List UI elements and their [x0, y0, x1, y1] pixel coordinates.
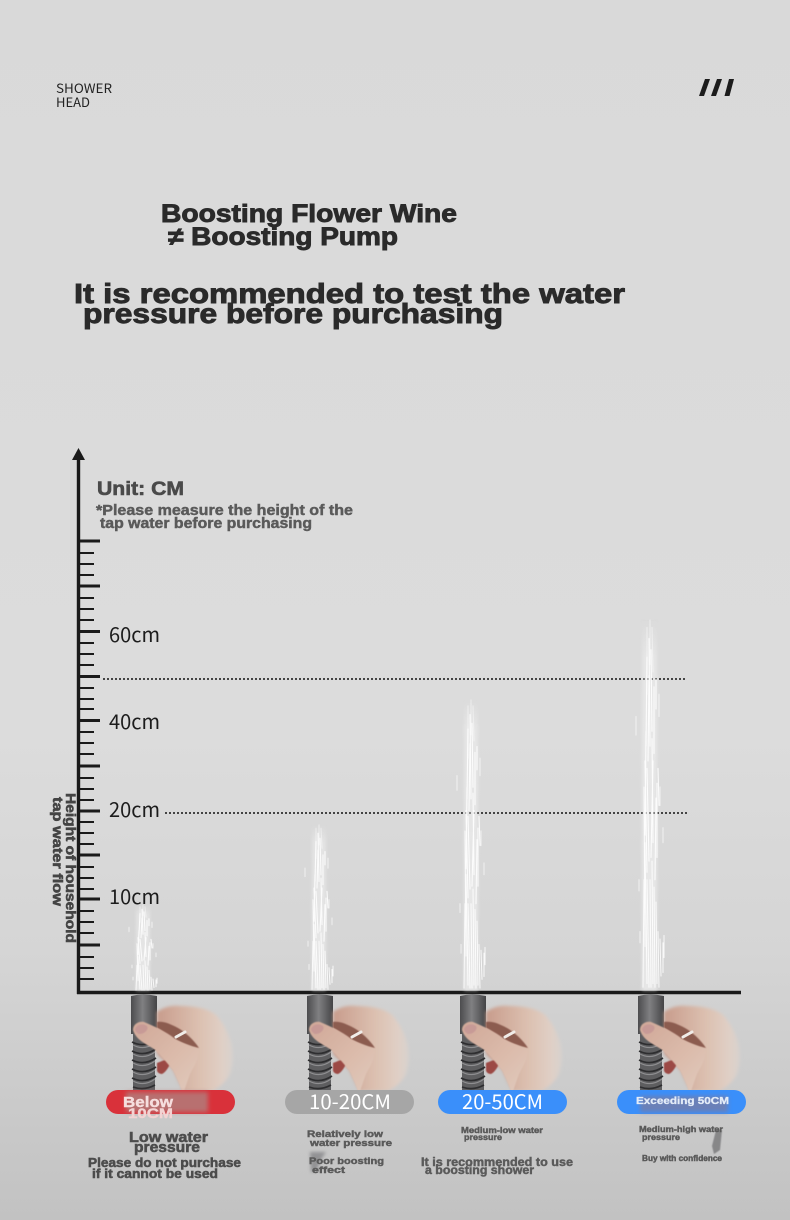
- axis scale labels: 40cm: [109, 706, 160, 735]
- icon: three slashes: [699, 79, 734, 96]
- caption: below 10cm: if it cannot be used: [92, 1166, 218, 1181]
- caption: 10-20cm: Poor boosting: [309, 1156, 384, 1167]
- axis scale labels: 60cm: [109, 619, 160, 648]
- chart: vertical axis with ticks: [77, 458, 741, 994]
- brand label: HEAD: [56, 92, 90, 111]
- subtitle: [74, 278, 625, 329]
- caption: 20-50cm: [421, 1125, 573, 1177]
- caption: below 10cm: [88, 1130, 241, 1181]
- subtitle: pressure before purchasing: [83, 298, 503, 329]
- pill: 10-20cm: [285, 1086, 414, 1115]
- smudge: [310, 1152, 326, 1172]
- pill: exceeding 50cm: Exceeding 50CM: [636, 1095, 729, 1107]
- axis title: tap water flow: [50, 797, 65, 907]
- caption: exceeding 50cm: [639, 1124, 724, 1163]
- hand holding shower 2: [307, 994, 409, 1091]
- smudge: [712, 1130, 722, 1154]
- unit note: *Please measure the height of the: [96, 503, 353, 519]
- caption: below 10cm: pressure: [134, 1140, 200, 1156]
- title: [161, 200, 457, 251]
- caption: exceeding 50cm: Medium-high water: [639, 1124, 724, 1134]
- pill: 20-50cm: [438, 1086, 567, 1115]
- title: Boosting Flower Wine: [161, 200, 457, 228]
- caption: 20-50cm: a boosting shower: [425, 1165, 535, 1177]
- unit note: [96, 478, 353, 532]
- unit note: tap water before purchasing: [100, 516, 312, 532]
- axis title: Height of household: [63, 793, 78, 943]
- unit note: Unit: CM: [97, 478, 184, 500]
- brand label: SHOWER: [56, 78, 112, 97]
- pill: 10-20cm: 10-20CM: [309, 1086, 391, 1115]
- axis scale labels: [109, 619, 160, 910]
- hand holding shower 3: [460, 994, 562, 1091]
- axis arrowhead: [72, 448, 85, 460]
- dotted reference lines: [103, 679, 688, 813]
- caption: 10-20cm: [307, 1129, 392, 1176]
- caption: 10-20cm: water pressure: [309, 1138, 392, 1149]
- caption: below 10cm: Low water: [129, 1130, 208, 1146]
- caption: exceeding 50cm: Buy with confidence: [642, 1154, 723, 1163]
- hand holding shower 4: [638, 994, 740, 1091]
- hand holding shower 1: [131, 994, 233, 1091]
- pill: below 10cm: Below: [123, 1094, 173, 1111]
- axis title: [50, 793, 78, 943]
- title: ≠ Boosting Pump: [168, 223, 398, 251]
- axis scale labels: 20cm: [109, 794, 160, 823]
- pill: below 10cm: 10CM: [128, 1105, 173, 1121]
- pill: 20-50cm: 20-50CM: [462, 1086, 543, 1115]
- caption: 10-20cm: effect: [312, 1165, 346, 1176]
- subtitle: It is recommended to test the water: [74, 278, 625, 309]
- water jets: [129, 620, 664, 991]
- caption: below 10cm: Please do not purchase: [88, 1155, 241, 1170]
- pill: below 10cm: [106, 1090, 235, 1121]
- caption: 10-20cm: Relatively low: [307, 1129, 384, 1140]
- brand label: [56, 78, 112, 111]
- caption: 20-50cm: pressure: [464, 1132, 502, 1142]
- caption: 20-50cm: It is recommended to use: [421, 1157, 573, 1169]
- pill: exceeding 50cm: [617, 1090, 746, 1114]
- axis scale labels: 10cm: [109, 881, 160, 910]
- caption: 20-50cm: Medium-low water: [461, 1125, 544, 1135]
- caption: exceeding 50cm: pressure: [642, 1132, 680, 1142]
